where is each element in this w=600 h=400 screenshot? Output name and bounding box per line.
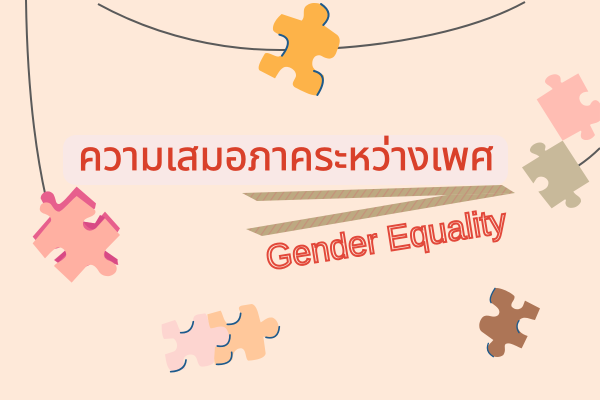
rope: upper strand xyxy=(242,185,515,201)
puzzle piece: brown bottom right xyxy=(479,288,540,357)
rope: lower strand xyxy=(246,193,515,236)
puzzle piece: tan right xyxy=(522,141,589,208)
puzzle piece: light pink right xyxy=(537,73,600,141)
puzzle piece: pale pink bottom xyxy=(162,313,230,372)
string: left curve xyxy=(26,0,46,198)
puzzle piece: pink left xyxy=(33,187,120,283)
string: right curve xyxy=(578,148,600,166)
puzzle piece: orange top xyxy=(259,3,340,95)
title: Thai: ความเสมอภาคระหว่างเพศ xyxy=(78,135,495,179)
puzzle piece: peach bottom xyxy=(207,304,279,365)
title panel xyxy=(63,135,508,185)
subtitle: Gender Equality: Gender Equality xyxy=(263,201,510,278)
string: top arc xyxy=(98,2,525,50)
